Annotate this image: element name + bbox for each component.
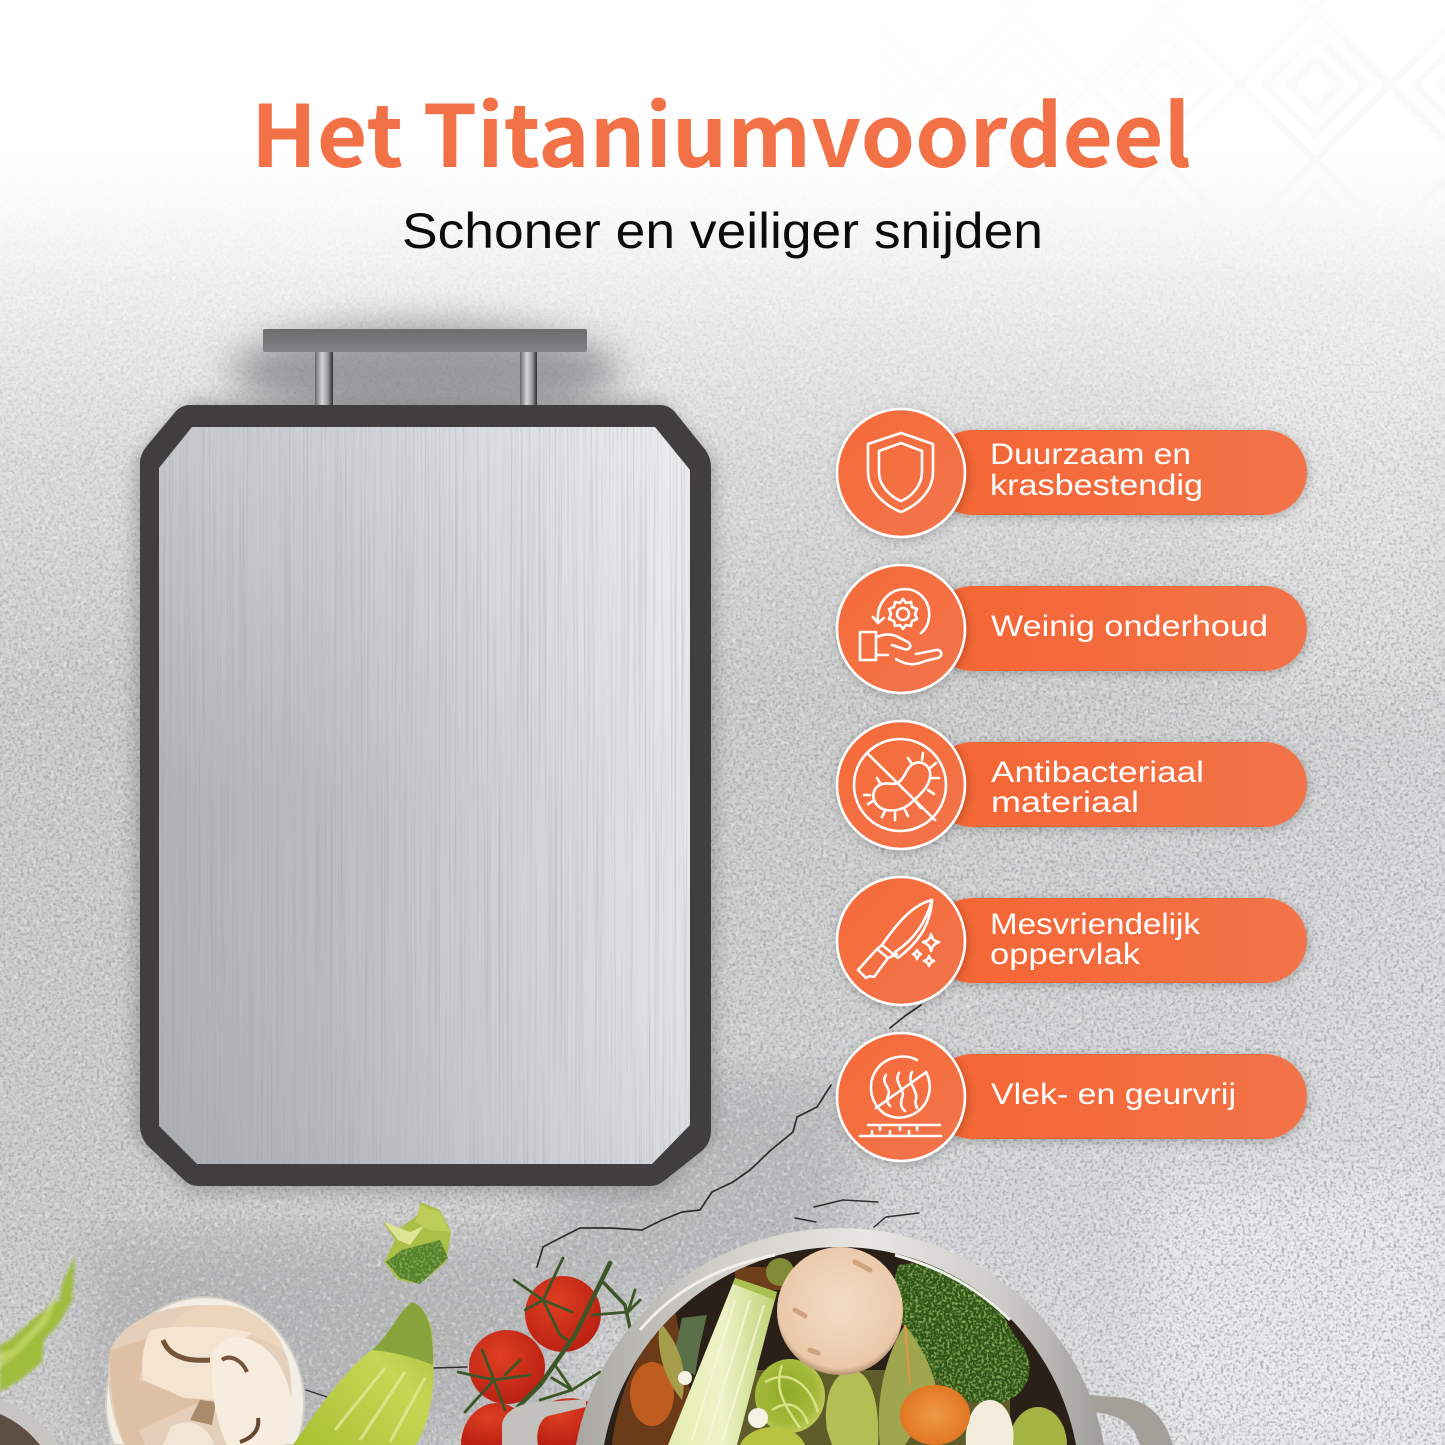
sprout behind mushroom [766, 1258, 794, 1286]
sliver of carrot behind mushroom [735, 1267, 795, 1290]
sprout two [826, 1370, 878, 1445]
bay leaf [879, 1325, 937, 1445]
pot with vegetables [576, 1228, 1104, 1445]
feature: Duurzaam en krasbestendig [837, 409, 1307, 537]
sprout one [755, 1359, 825, 1433]
carrot slice [900, 1385, 970, 1445]
feature: Mesvriendelijk oppervlak: Mesvriendelijk [990, 908, 1201, 941]
food: small bowl rim bottom-left [0, 1398, 60, 1445]
food: mushroom bowl [106, 1297, 304, 1445]
concrete cracks [306, 1005, 921, 1397]
food: lettuce leaf [0, 1255, 75, 1392]
feature: Antibacteriaal materiaal: materiaal [991, 786, 1139, 819]
feature: Antibacteriaal materiaal: Antibacteriaal [991, 756, 1204, 789]
feature: Weinig onderhoud: Weinig onderhoud [991, 610, 1268, 643]
feature: Antibacteriaal materiaal [837, 721, 1307, 849]
brown broth left [612, 1313, 690, 1445]
sprout right [1009, 1407, 1067, 1445]
cauliflower crumbs [678, 1371, 692, 1385]
feature: Vlek- en geurvrij [837, 1033, 1307, 1161]
leek [668, 1278, 777, 1445]
soft shadow around board [134, 400, 716, 1192]
cutting board [140, 405, 711, 1186]
broccoli [894, 1263, 1029, 1404]
cauliflower [966, 1400, 1013, 1445]
food: cherry tomatoes [458, 1258, 640, 1445]
food: broccoli floret [383, 1202, 451, 1284]
left greens [676, 1315, 707, 1375]
soft shadow behind handle [230, 324, 620, 420]
cutting board handle [263, 329, 587, 406]
mushroom slice [777, 1247, 903, 1375]
sprout bottom [740, 1427, 805, 1445]
feature: Mesvriendelijk oppervlak: oppervlak [990, 938, 1141, 971]
feature: Duurzaam en krasbestendig: krasbestendig [990, 469, 1203, 502]
feature: Mesvriendelijk oppervlak [837, 877, 1307, 1005]
bay leaf left [659, 1322, 684, 1400]
feature: Duurzaam en krasbestendig: Duurzaam en [990, 438, 1191, 471]
greens fill under vegetables [735, 1370, 1010, 1445]
subtitle: Schoner en veiliger snijden [402, 203, 1043, 259]
feature: Weinig onderhoud [837, 565, 1307, 693]
bay leaf midrib [905, 1325, 910, 1385]
title: Het Titaniumvoordeel [251, 67, 1191, 192]
pot: left handle [502, 1399, 586, 1445]
feature: Vlek- en geurvrij: Vlek- en geurvrij [991, 1078, 1236, 1111]
sprout one veins [765, 1365, 818, 1428]
carrot left [630, 1362, 674, 1426]
pot: right handle [1090, 1395, 1173, 1445]
food: courgette [293, 1302, 434, 1445]
